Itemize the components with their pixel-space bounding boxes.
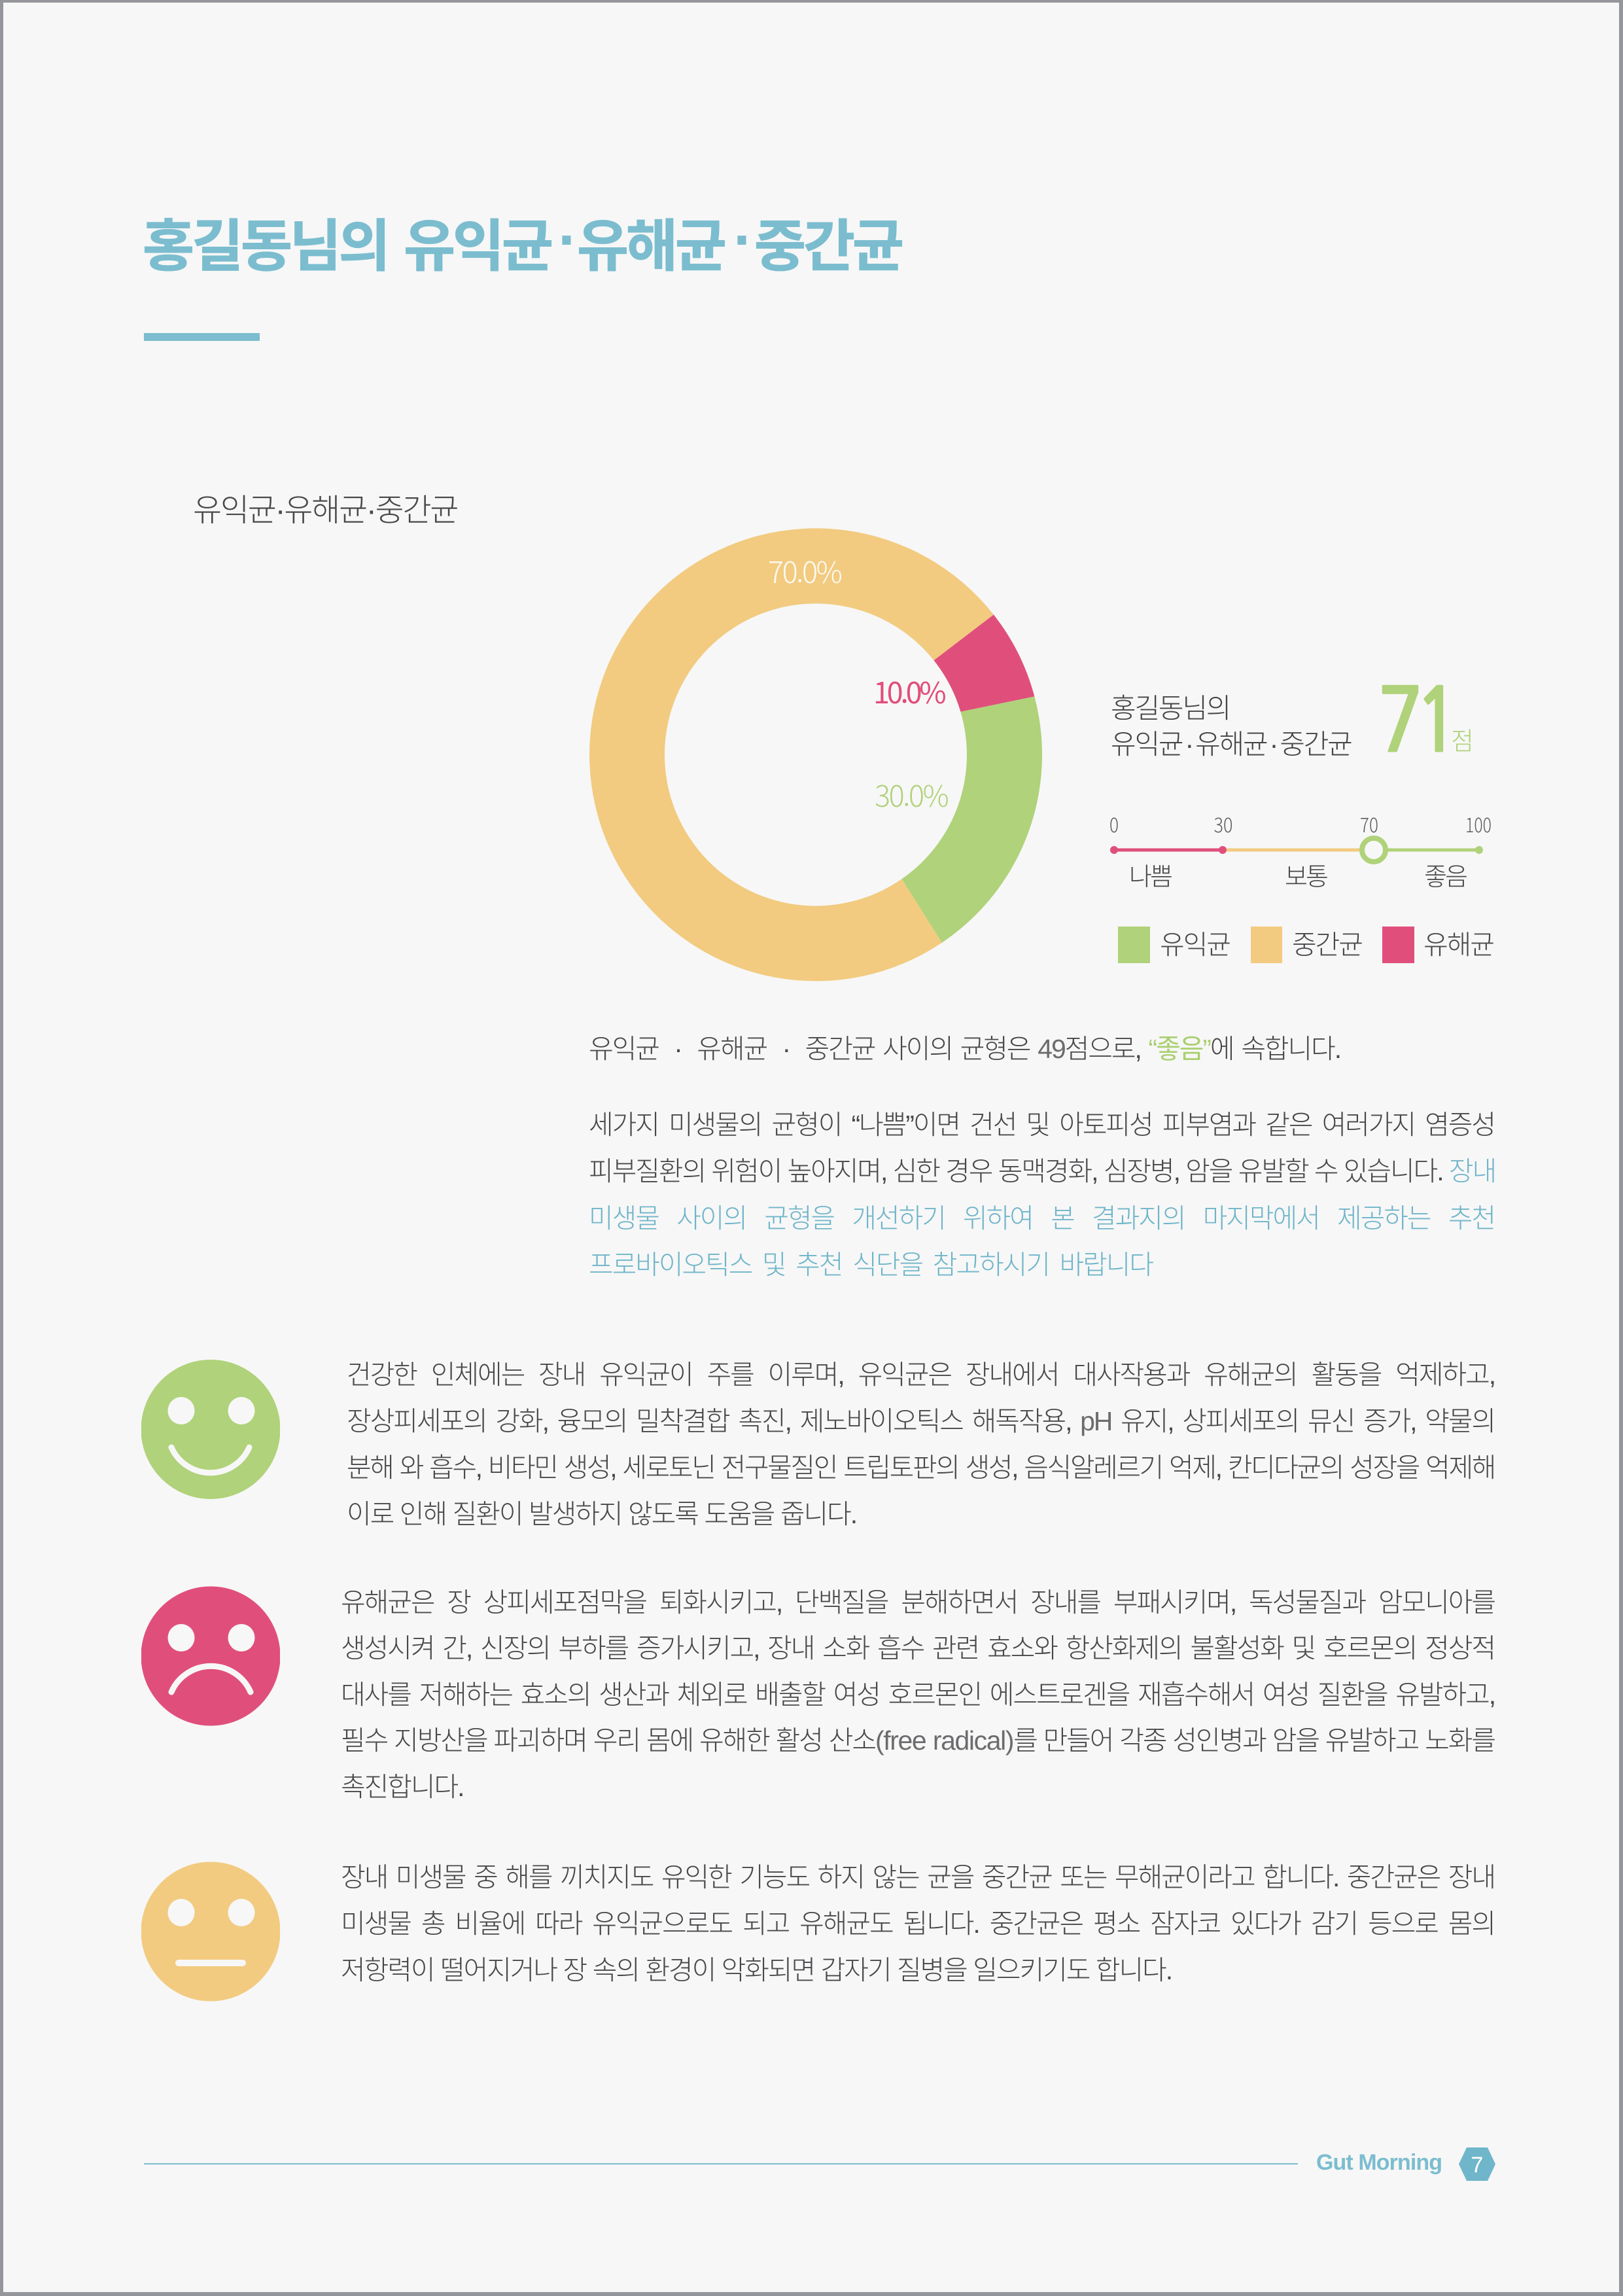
segment: 유해균 (934, 614, 1034, 712)
icon: happy face (141, 1360, 280, 1499)
title: · (734, 209, 750, 272)
section heading: 유익균·유해균·중간균 (193, 493, 457, 528)
segment: 유익균 (902, 696, 1042, 943)
score label: 유익균·유해균·중간균 (1111, 729, 1352, 760)
text: harmful bacteria (341, 1587, 1495, 1802)
scale numbers (1109, 809, 1492, 838)
text: harmful bacteria: 생성시켜 간, 신장의 부하를 증가시키고, 장내 소화 흡수 관련 효소와 항산화제의 불활성화 및 호르몬의 정상적 (341, 1633, 1495, 1663)
title: 유해균 (577, 215, 724, 278)
donut label 30%: 30.0% (875, 773, 947, 815)
donut chart (589, 528, 1042, 981)
text: neutral bacteria: 장내 미생물 중 해를 끼치지도 유익한 기능도 하지 않는 균을 중간균 또는 무해균이라고 합니다. 중간균은 장내 (341, 1862, 1495, 1892)
text: harmful bacteria: 필수 지방산을 파괴하며 우리 몸에 유해한 활성 산소(free radical)를 만들어 각종 성인병과 암을 유발하고 노화를 (341, 1725, 1495, 1756)
balance explanation: 미생물 사이의 균형을 개선하기 위하여 본 결과지의 마지막에서 제공하는 추천 (589, 1203, 1495, 1233)
balance explanation (589, 1110, 1495, 1280)
text: beneficial bacteria: 이로 인해 질환이 발생하지 않도록 도움을 줍니다. (347, 1499, 856, 1529)
score number: 71 (1377, 678, 1450, 766)
footer rule (144, 2163, 1298, 2164)
score scale (1109, 811, 1492, 864)
title: 유익균 (404, 215, 551, 278)
title: 중간균 (754, 215, 901, 278)
scale track (1110, 846, 1483, 854)
balance summary: 유익균 · 유해균 · 중간균 사이의 균형은 49점으로, “좋음”에 속합니다. (589, 1034, 1340, 1064)
balance explanation: 세가지 미생물의 균형이 “나쁨”이면 건선 및 아토피성 피부염과 같은 여러가지 염증성 (589, 1110, 1495, 1140)
balance explanation: 프로바이오틱스 및 추천 식단을 참고하시기 바랍니다 (589, 1250, 1153, 1280)
score unit: 점 (1451, 728, 1474, 756)
text: neutral bacteria: 미생물 총 비율에 따라 유익균으로도 되고 유해균도 됩니다. 중간균은 평소 잠자코 있다가 감기 등으로 몸의 (341, 1909, 1495, 1939)
donut label 10%: 10.0% (873, 669, 943, 712)
scale label: 좋음: 좋음 (1424, 864, 1466, 891)
scale label: 보통: 보통 (1285, 864, 1327, 891)
balance explanation: 피부질환의 위험이 높아지며, 심한 경우 동맥경화, 심장병, 암을 유발할 수 있습니다. 장내 (589, 1156, 1495, 1186)
text: beneficial bacteria: 분해 와 흡수, 비타민 생성, 세로토닌 전구물질인 트립토판의 생성, 음식알레르기 억제, 칸디다균의 성장을 억제해 (347, 1453, 1495, 1483)
legend: 중간균 (1292, 930, 1362, 960)
title underline (144, 333, 260, 341)
text: beneficial bacteria: 장상피세포의 강화, 융모의 밀착결합 촉진, 제노바이오틱스 해독작용, pH 유지, 상피세포의 뮤신 증가, 약물의 (347, 1406, 1495, 1436)
legend (1118, 927, 1493, 963)
legend: 유해균 (1423, 930, 1493, 960)
score label (1111, 693, 1352, 760)
segment: 중간균 (589, 528, 994, 981)
text: harmful bacteria: 촉진합니다. (341, 1772, 463, 1802)
donut label 70%: 70.0% (768, 549, 841, 592)
text: beneficial bacteria: 건강한 인체에는 장내 유익균이 주를 이루며, 유익균은 장내에서 대사작용과 유해균의 활동을 억제하고, (347, 1360, 1495, 1390)
text: beneficial bacteria (347, 1360, 1495, 1529)
page number badge (1459, 2147, 1495, 2181)
text: harmful bacteria: 대사를 저해하는 효소의 생산과 체외로 배출할 여성 호르몬인 에스트로겐을 재흡수해서 여성 질환을 유발하고, (341, 1680, 1495, 1710)
text: neutral bacteria (341, 1862, 1495, 1985)
icon: sad face (141, 1586, 280, 1726)
score label: 홍길동님의 (1111, 693, 1230, 724)
text: harmful bacteria: 유해균은 장 상피세포점막을 퇴화시키고, 단백질을 분해하면서 장내를 부패시키며, 독성물질과 암모니아를 (341, 1587, 1495, 1617)
scale label: 나쁨: 나쁨 (1129, 864, 1171, 891)
title: 홍길동님의 (143, 215, 388, 278)
legend: 유익균 (1160, 930, 1230, 960)
icon: neutral face (141, 1862, 280, 2001)
score marker (1362, 838, 1386, 862)
footer brand: Gut Morning (1316, 2150, 1442, 2175)
page number badge: 7 (1471, 2153, 1483, 2178)
text: neutral bacteria: 저항력이 떨어지거나 장 속의 환경이 악화되면 갑자기 질병을 일으키기도 합니다. (341, 1955, 1172, 1985)
title: · (559, 209, 574, 272)
title (143, 209, 903, 278)
